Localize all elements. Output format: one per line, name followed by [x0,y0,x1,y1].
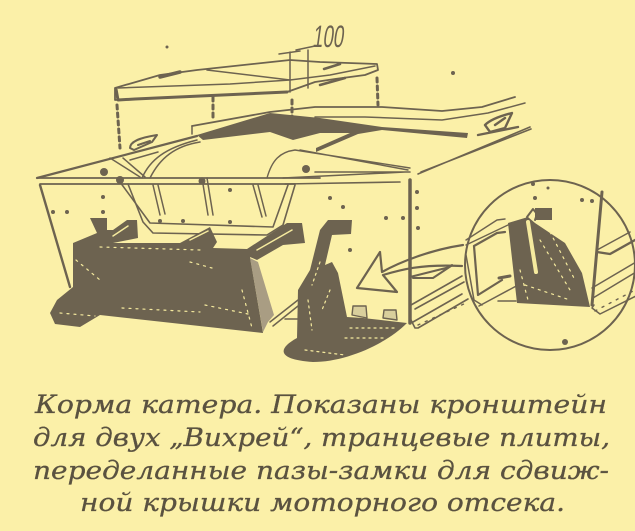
caption line 4: ной крышки моторного отсека. [80,488,565,517]
sliding lid [115,46,378,100]
transom panel [40,178,410,323]
engine bracket and transom plate [50,218,305,333]
side rails [410,265,468,328]
bright scratches on plate [60,226,292,328]
caption line 2: для двух „Вихрей“, транцевые плиты, [33,423,610,452]
rivet strip [418,290,635,325]
dashed guide lines [117,78,378,148]
caption line 3: переделанные пазы-замки для сдвиж- [33,456,609,485]
deck rails [37,97,531,184]
dark wedge strap [197,113,468,152]
caption [33,390,610,517]
deck cleats [130,113,518,150]
dimension label: 100 [311,19,347,54]
second bracket and skeg [284,220,407,362]
worn plate edge [250,258,274,332]
magnified detail circle [465,180,635,350]
caption line 1: Корма катера. Показаны кронштейн [34,390,607,419]
transom rivets [51,46,455,252]
drawing: boat stern [37,19,635,362]
thin rails behind bracket [270,300,299,326]
arrow pointing to bracket [357,245,463,292]
